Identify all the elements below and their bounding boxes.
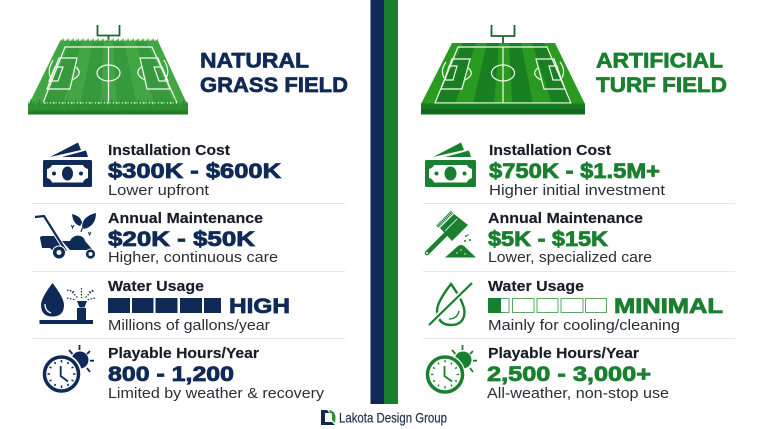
row: water usage artificial: Mainly for cooling/cleaning bbox=[488, 318, 680, 334]
heading: artificial turf field: ARTIFICIAL bbox=[596, 48, 723, 72]
row: installation cost natural: Lower upfront bbox=[108, 183, 209, 199]
gauge: one partial segment of five bbox=[488, 298, 606, 313]
row: water usage artificial: Water Usage bbox=[488, 279, 584, 295]
center divider: navy and green bars bbox=[370, 0, 398, 404]
heading: natural grass field bbox=[200, 48, 348, 97]
row: playable hours natural: Limited by weather & recovery bbox=[108, 386, 325, 402]
icon: cash bbox=[425, 142, 476, 187]
icon: lawn mower bbox=[35, 213, 96, 259]
heading: natural grass field: NATURAL bbox=[200, 48, 309, 72]
icon: natural grass field bbox=[28, 25, 188, 114]
icon: clock and sun bbox=[41, 345, 94, 394]
row: annual maintenance artificial: Annual Maintenance bbox=[488, 211, 643, 227]
icon: logo mark bbox=[321, 410, 336, 425]
row: playable hours natural: Playable Hours/Year bbox=[108, 346, 259, 362]
row: annual maintenance natural: Annual Maintenance bbox=[108, 211, 263, 227]
row: installation cost artificial: Installation Cost bbox=[489, 143, 611, 159]
row: annual maintenance natural: Higher, continuous care bbox=[108, 250, 278, 266]
icon: artificial turf field bbox=[421, 25, 585, 114]
row: annual maintenance natural bbox=[35, 211, 278, 266]
heading: artificial turf field bbox=[596, 48, 727, 97]
row: annual maintenance artificial: $5K - $15K bbox=[488, 228, 608, 251]
row: installation cost natural: $300K - $600K bbox=[108, 160, 281, 183]
row: playable hours natural bbox=[41, 345, 325, 402]
icon: clock and sun bbox=[424, 345, 477, 395]
panel: natural grass field bbox=[28, 25, 348, 402]
row: installation cost natural: Installation Cost bbox=[108, 143, 230, 159]
row: annual maintenance artificial: Lower, specialized care bbox=[488, 250, 652, 266]
row: playable hours natural: 800 - 1,200 bbox=[108, 363, 234, 386]
icon: crossed-out water drop bbox=[429, 283, 472, 325]
icon: cash bbox=[43, 142, 92, 187]
row: installation cost artificial bbox=[425, 142, 665, 199]
gauge: five filled segments bbox=[108, 298, 221, 313]
row: playable hours artificial: Playable Hours/Year bbox=[488, 346, 639, 362]
row: installation cost artificial: Higher initial investment bbox=[489, 183, 665, 199]
panel: artificial turf field bbox=[421, 25, 735, 402]
row: water usage natural: Millions of gallons/year bbox=[108, 318, 270, 334]
row: playable hours artificial bbox=[424, 345, 669, 402]
icon: water drop and sprinkler bbox=[40, 283, 95, 324]
row: annual maintenance natural: $20K - $50K bbox=[108, 228, 255, 251]
row: installation cost natural bbox=[43, 142, 281, 199]
icon: brush and infill pile bbox=[426, 212, 476, 258]
row: water usage natural: Water Usage bbox=[108, 279, 204, 295]
row: installation cost artificial: $750K - $1.5M+ bbox=[489, 160, 660, 183]
row: water usage artificial: MINIMAL bbox=[614, 295, 723, 318]
row: annual maintenance artificial bbox=[426, 211, 652, 266]
row: playable hours artificial: All-weather, non-stop use bbox=[487, 386, 669, 402]
heading: artificial turf field: TURF FIELD bbox=[596, 73, 727, 97]
row: water usage natural bbox=[40, 279, 290, 334]
row: water usage natural: HIGH bbox=[229, 295, 290, 318]
row: water usage artificial bbox=[429, 279, 723, 334]
heading: natural grass field: GRASS FIELD bbox=[200, 73, 348, 97]
row: playable hours artificial: 2,500 - 3,000+ bbox=[487, 363, 651, 386]
footer logo: Lakota Design Group: Lakota Design Group bbox=[339, 410, 447, 426]
